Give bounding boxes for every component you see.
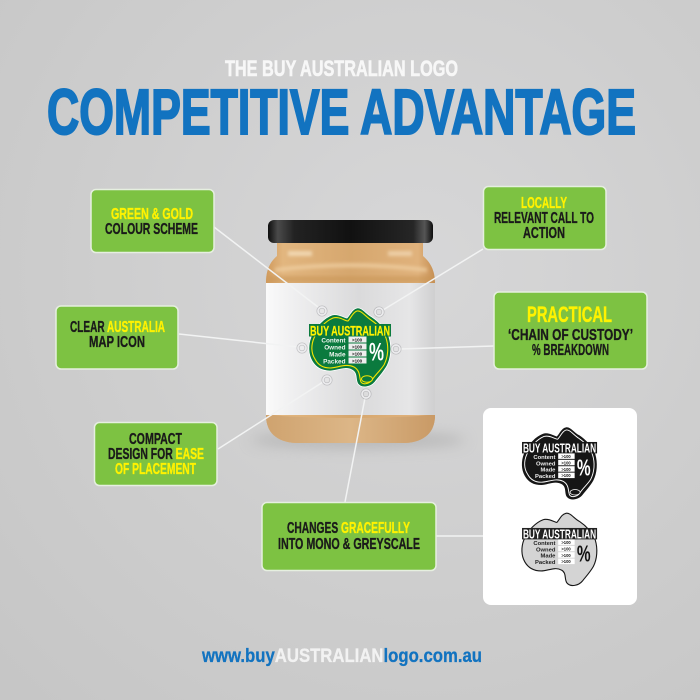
jar highlights xyxy=(268,251,433,283)
callout: call to action: LOCALLY xyxy=(521,195,567,212)
logo: mono black: >100 xyxy=(561,460,571,465)
map inner outline xyxy=(312,311,388,384)
logo: greyscale: % xyxy=(577,540,591,566)
banner xyxy=(309,324,391,336)
jar shadow xyxy=(250,432,466,448)
logo: colour xyxy=(309,308,391,387)
row values: >100 xyxy=(352,358,363,364)
logo: greyscale: BUY AUSTRALIAN xyxy=(523,526,596,541)
callout: green and gold: GREEN & GOLD xyxy=(111,206,193,223)
row values xyxy=(348,336,366,364)
row values: >100 xyxy=(352,352,363,356)
logo: greyscale: Owned xyxy=(536,547,556,553)
callout: map icon: CLEAR AUSTRALIA xyxy=(70,319,165,336)
callout: call to action xyxy=(484,186,606,250)
callout: call to action: ACTION xyxy=(523,225,565,242)
callout: mono and greyscale: INTO MONO & GREYSCALE xyxy=(278,536,420,553)
logo: mono black: Owned xyxy=(536,461,556,467)
panel: mono logos xyxy=(483,408,637,605)
logo: mono black: Made xyxy=(540,468,556,474)
callout: call to action: RELEVANT CALL TO xyxy=(494,210,594,227)
callout: chain of custody: % BREAKDOWN xyxy=(532,342,609,359)
website url: www.buyAUSTRALIANlogo.com.au xyxy=(201,646,482,667)
callout: map icon xyxy=(56,306,178,369)
logo: mono black: Content xyxy=(533,455,555,461)
logo: greyscale: >100 xyxy=(561,546,571,551)
logo: greyscale: Packed xyxy=(535,560,556,566)
logo: greyscale: >100 xyxy=(561,559,571,564)
tasmania loop xyxy=(362,376,372,382)
row labels: Packed xyxy=(323,358,346,365)
callout: chain of custody xyxy=(494,292,647,369)
logo: greyscale: >100 xyxy=(561,540,571,545)
callout: compact design: DESIGN FOR EASE xyxy=(108,446,204,463)
logo: mono black: >100 xyxy=(561,473,571,478)
callout: compact design: OF PLACEMENT xyxy=(115,461,196,478)
callout: chain of custody: ‘CHAIN OF CUSTODY’ xyxy=(508,327,633,344)
logo: mono black xyxy=(522,427,597,500)
jar contents xyxy=(266,243,435,443)
row labels: Made xyxy=(329,351,346,358)
logo: mono black: Packed xyxy=(535,474,556,480)
connector lines xyxy=(179,227,494,536)
logo: colour: BUY AUSTRALIAN xyxy=(310,322,390,338)
row labels: Content xyxy=(321,338,346,344)
logo: mono black: % xyxy=(577,454,591,480)
callout: mono and greyscale: CHANGES GRACEFULLY xyxy=(287,520,410,537)
row labels: Owned xyxy=(324,344,346,352)
jar xyxy=(250,220,466,448)
logo: mono black: >100 xyxy=(561,467,571,472)
logo: greyscale: Made xyxy=(540,554,556,560)
map shape xyxy=(309,308,391,387)
callout: compact design xyxy=(94,422,217,486)
row values: >100 xyxy=(352,344,363,350)
subtitle: THE BUY AUSTRALIAN LOGO xyxy=(225,56,458,81)
row labels xyxy=(321,338,346,365)
callout: mono and greyscale xyxy=(262,502,436,570)
logo: mono black: BUY AUSTRALIAN xyxy=(523,440,596,455)
callout: green and gold xyxy=(91,190,214,252)
callout: compact design: COMPACT xyxy=(129,431,182,448)
logo: greyscale xyxy=(522,513,597,586)
logo: greyscale: Content xyxy=(533,541,555,547)
jar label xyxy=(266,283,435,415)
jar base xyxy=(266,415,435,443)
row values: >100 xyxy=(352,338,363,342)
percent sign: % xyxy=(369,338,384,366)
callout: map icon: MAP ICON xyxy=(89,334,145,351)
logo: greyscale: >100 xyxy=(561,553,571,558)
connector rings xyxy=(298,307,400,398)
callout: green and gold: COLOUR SCHEME xyxy=(105,221,198,238)
callout: chain of custody: PRACTICAL xyxy=(527,302,612,327)
jar lid xyxy=(268,220,433,243)
logo: mono black: >100 xyxy=(561,454,571,459)
